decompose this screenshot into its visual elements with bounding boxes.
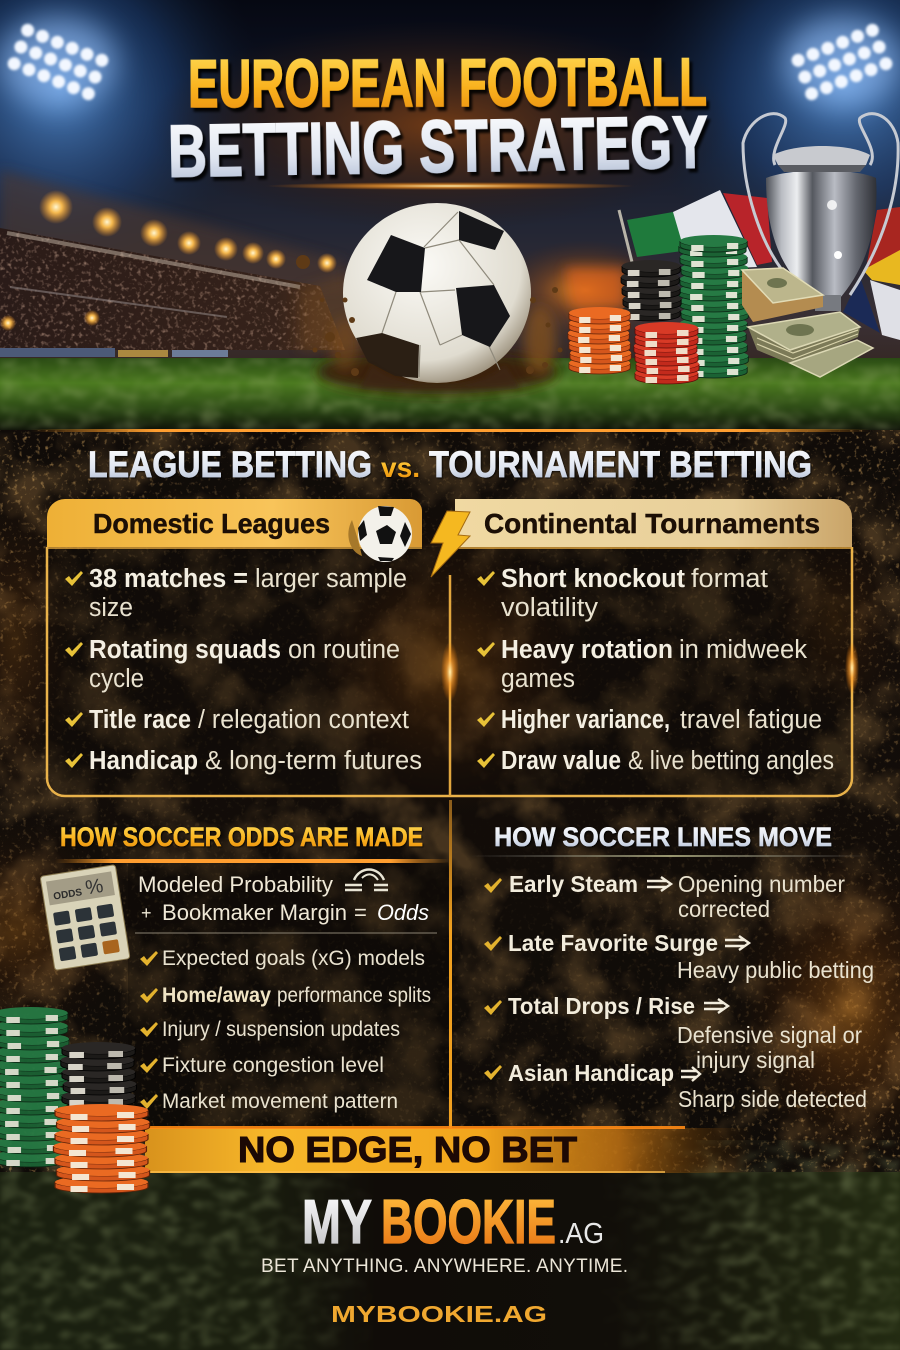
line movement list: Opening number xyxy=(678,871,845,897)
list: continental tournaments xyxy=(477,565,834,775)
list: domestic leagues: cycle xyxy=(89,665,144,693)
list: continental tournaments: Draw value xyxy=(501,747,621,775)
comparison heading: LEAGUE BETTING xyxy=(88,444,372,485)
comparison heading xyxy=(88,444,812,485)
line movement list: injury signal xyxy=(696,1047,815,1073)
title xyxy=(167,44,709,193)
line movement list: corrected xyxy=(678,896,770,922)
poker chips hero xyxy=(568,235,748,384)
logo: .AG xyxy=(558,1218,604,1250)
list: domestic leagues: size xyxy=(89,594,133,622)
list: continental tournaments: & live betting angles xyxy=(628,747,834,775)
icon: lightning bolt xyxy=(431,511,470,577)
formula: Bookmaker Margin xyxy=(162,900,347,925)
checklist: Fixture congestion level xyxy=(162,1053,384,1077)
formula: + xyxy=(141,903,152,923)
formula: Odds xyxy=(377,900,429,925)
list: continental tournaments: Short knockout xyxy=(501,565,685,593)
line movement list: Heavy public betting xyxy=(677,957,874,983)
checklist: Market movement pattern xyxy=(162,1089,398,1113)
ball turf xyxy=(0,306,900,430)
formula xyxy=(138,872,429,925)
checklist: Expected goals (xG) models xyxy=(162,946,425,970)
floodlight right xyxy=(784,18,900,106)
hero bottom glow line xyxy=(30,429,870,432)
header: domestic leagues: Domestic Leagues xyxy=(93,508,330,539)
logo: BOOKIE xyxy=(381,1188,556,1257)
stadium crowd and lights xyxy=(0,170,625,357)
formula: = xyxy=(354,900,367,925)
header: continental tournaments xyxy=(455,499,852,547)
logo xyxy=(302,1188,604,1257)
centre divider lower xyxy=(449,800,452,1128)
calculator icon: % xyxy=(84,875,105,899)
calculator icon: ODDS xyxy=(53,887,83,903)
formula: Modeled Probability xyxy=(138,872,333,897)
list: domestic leagues: on routine xyxy=(288,636,400,664)
dirt spray xyxy=(296,255,562,376)
poker chips left xyxy=(0,1007,150,1193)
icon: ball with laurel xyxy=(348,506,412,562)
checklist: performance splits xyxy=(277,983,431,1007)
checklist: Home/away xyxy=(162,983,271,1007)
list: continental tournaments: Higher variance, xyxy=(501,706,670,734)
trophy xyxy=(743,114,898,311)
list: domestic leagues: & long-term futures xyxy=(205,747,422,775)
line movement list: Total Drops / Rise xyxy=(508,993,695,1019)
line movement list: Late Favorite Surge xyxy=(508,930,718,956)
website url: MYBOOKIE.AG xyxy=(331,1301,547,1327)
comparison heading: vs. xyxy=(381,452,420,483)
list: continental tournaments: Heavy rotation xyxy=(501,636,673,664)
comparison heading: TOURNAMENT BETTING xyxy=(429,444,812,485)
list: domestic leagues: 38 matches = xyxy=(89,565,248,593)
header: continental tournaments: Continental Tournaments xyxy=(484,508,820,539)
title underline glow xyxy=(265,182,635,190)
panel: how soccer lines move xyxy=(470,822,874,1112)
list: domestic leagues: Title race xyxy=(89,706,191,734)
line movement list xyxy=(484,871,874,1112)
list: domestic leagues: Handicap xyxy=(89,747,198,775)
list: domestic leagues xyxy=(65,565,422,775)
list: continental tournaments: volatility xyxy=(501,594,598,622)
heading: HOW SOCCER ODDS ARE MADE xyxy=(60,822,423,852)
line movement list: Early Steam xyxy=(509,871,638,897)
orange divider flare xyxy=(441,642,459,702)
checklist xyxy=(140,946,431,1113)
list: domestic leagues: Rotating squads xyxy=(89,636,281,664)
heading: HOW SOCCER LINES MOVE xyxy=(494,822,832,852)
checklist: Injury / suspension updates xyxy=(162,1017,400,1041)
panel: league vs tournament xyxy=(47,499,859,796)
list: domestic leagues: larger sample xyxy=(255,565,407,593)
header: domestic leagues xyxy=(47,499,422,547)
line movement list: Defensive signal or xyxy=(677,1022,862,1048)
list: continental tournaments: games xyxy=(501,665,575,693)
calculator icon xyxy=(40,865,130,970)
soccer ball xyxy=(343,203,531,388)
list: domestic leagues: / relegation context xyxy=(198,706,409,734)
floodlight left xyxy=(0,18,116,106)
tagline: BET ANYTHING. ANYWHERE. ANYTIME. xyxy=(261,1256,628,1277)
banner: no edge no bet: NO EDGE, NO BET xyxy=(238,1129,577,1170)
line movement list: Sharp side detected xyxy=(678,1086,867,1112)
list: continental tournaments: format xyxy=(691,565,768,593)
cash stacks xyxy=(742,268,873,377)
logo: MY xyxy=(302,1188,372,1257)
list: continental tournaments: travel fatigue xyxy=(680,706,822,734)
banner: no edge no bet xyxy=(145,1126,755,1173)
title: BETTING STRATEGY xyxy=(167,100,709,193)
flags xyxy=(619,190,900,340)
line movement list: Asian Handicap xyxy=(508,1060,674,1086)
list: continental tournaments: in midweek xyxy=(679,636,807,664)
icon: formula arrows xyxy=(345,870,388,890)
panel: how soccer odds are made xyxy=(40,822,450,1128)
